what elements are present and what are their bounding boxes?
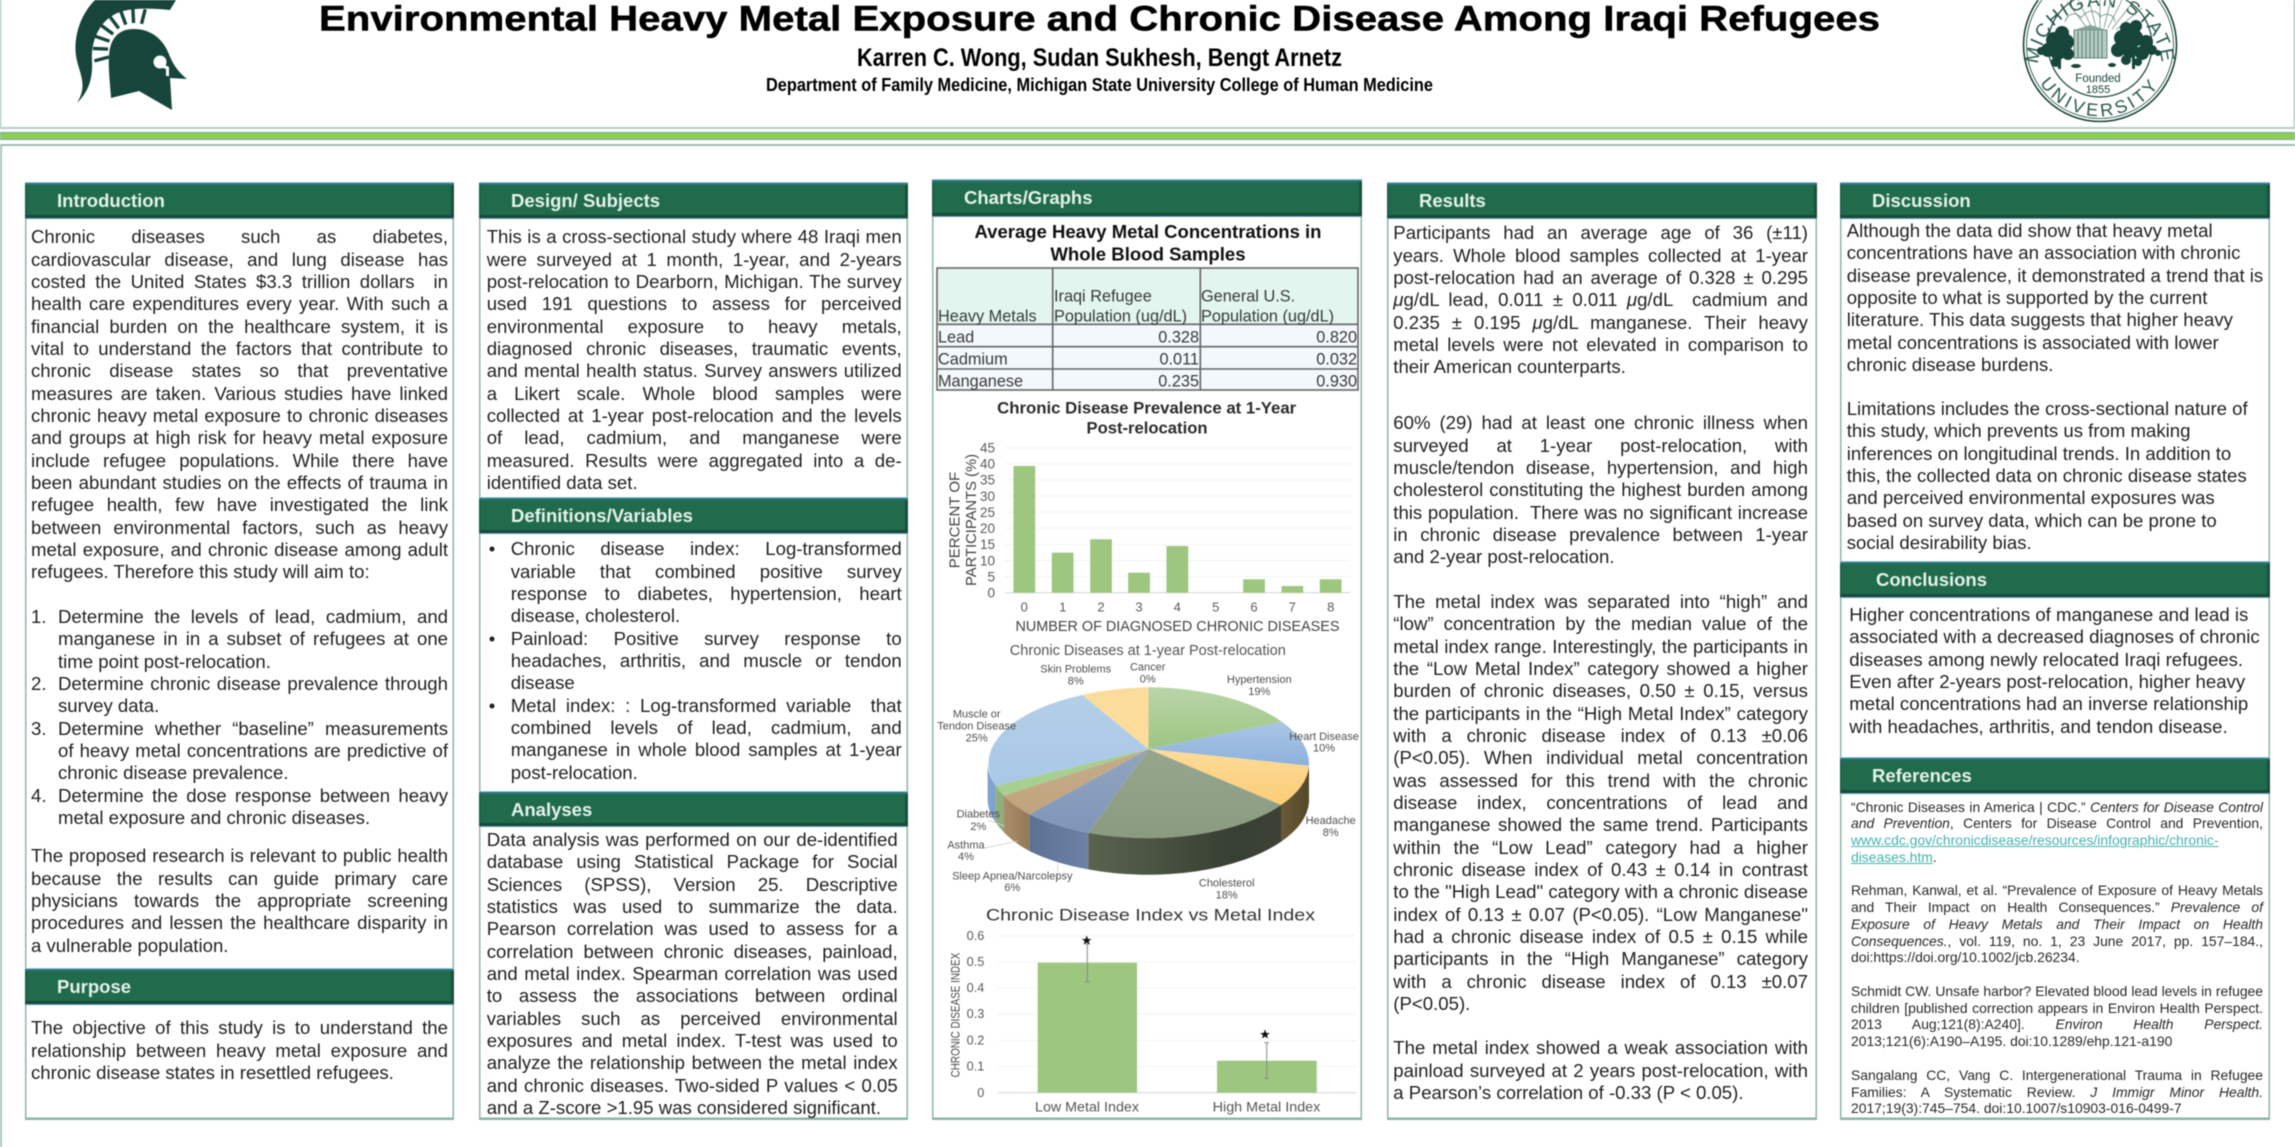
text: analyses: and a Z-score >1.95 was considered significant. — [487, 1097, 881, 1118]
text: discussion: disease prevalence, it demonstrated a trend that is — [1847, 265, 2263, 286]
text: discussion: chronic disease burdens. — [1847, 354, 2053, 375]
bar chart title: Chronic Disease Prevalence at 1-Year — [997, 399, 1297, 417]
table title — [974, 221, 1322, 265]
text: analyses: Pearson correlation was used to assess for a — [487, 918, 898, 939]
list: variable definitions: headaches, arthritis, and muscle or tendon — [511, 650, 902, 671]
pie chart: chronic diseases: 6% — [1004, 882, 1020, 894]
list: variable definitions: • — [489, 628, 495, 649]
pie chart: chronic diseases: Hypertension — [1227, 674, 1292, 686]
text: introduction paragraph: and groups at high risk for heavy metal exposure — [31, 427, 448, 448]
text: painload association — [1392, 1037, 1808, 1104]
list: variable definitions — [488, 538, 902, 784]
table: heavy metal concentrations: 0.235 — [1158, 373, 1199, 391]
text: chronic illness prevalence: surveyed at 1-year post-relocation, with — [1393, 435, 1808, 456]
text: references: 2017;19(3):745–754. doi:10.1007/s10903-016-0499-7 — [1851, 1100, 2182, 1116]
text: conclusions: metal concentrations had an inverse relationship — [1849, 693, 2248, 714]
text: metal index findings: to the "High Lead" category with a chronic disease — [1393, 881, 1808, 902]
bar chart: chronic disease prevalence: 40 — [980, 457, 995, 472]
text: design: measured. Results were aggregated into a de- — [487, 450, 902, 471]
heading: references — [1840, 758, 2270, 793]
heading: purpose: Purpose — [57, 976, 131, 997]
text: discussion: literature. This data suggests that higher heavy — [1847, 309, 2233, 330]
table: heavy metal concentrations: Population (ug/dL) — [1054, 308, 1187, 326]
panel: discussion, conclusions, references — [1840, 183, 2270, 1120]
list: study aims: Determine whether “baseline” measurements — [58, 718, 448, 739]
charts column — [936, 221, 1360, 1116]
bar chart: chronic disease prevalence: 4 — [1174, 600, 1181, 615]
text: metal index findings: with a chronic disease index of 0.13 ±0.07 — [1393, 971, 1808, 992]
bar chart: chronic disease prevalence: 3 — [1135, 600, 1143, 615]
pie chart: chronic diseases: 25% — [966, 733, 988, 745]
pie chart: chronic diseases: Tendon Disease — [937, 721, 1016, 733]
text: metal index findings: index of 0.13 ± 0.07 (P<0.05). “Low Manganese" — [1393, 904, 1808, 925]
text: public health relevance: a vulnerable population. — [31, 935, 228, 956]
pie chart: chronic diseases: Cholesterol — [1199, 878, 1255, 890]
pie chart: chronic diseases: 2% — [970, 821, 986, 833]
university seal: UNIVERSITY — [2041, 76, 2156, 118]
text: purpose — [30, 1017, 448, 1084]
text: public health relevance: procedures and lessen the healthcare disparity in — [31, 912, 448, 933]
panel: charts and graphs — [932, 180, 1362, 1120]
table: heavy metal concentrations: 0.011 — [1159, 350, 1199, 368]
text: introduction paragraph: refugees. Therefore this study will aim to: — [31, 561, 370, 582]
list: variable definitions: • — [489, 538, 495, 559]
table: heavy metal concentrations: Iraqi Refugee — [1054, 288, 1152, 306]
text: analyses: database using Statistical Package for Social — [487, 851, 898, 872]
bar chart: chronic disease prevalence: 25 — [980, 505, 995, 520]
text: design: were surveyed at 1 month, 1-year, and 2-years — [487, 249, 902, 270]
text: introduction paragraph: vital to understand the factors that contribute to — [31, 338, 448, 359]
text: limitations: social desirability bias. — [1847, 532, 2032, 553]
text: participants and metal levels: post-relocation had an average of 0.328 ± 0.295 — [1393, 267, 1808, 288]
text: participants and metal levels: metal levels were not elevated in comparison to — [1393, 334, 1808, 355]
bar chart title: Post-relocation — [1086, 419, 1208, 437]
bar chart: chronic disease index vs metal index: 0.5 — [967, 955, 984, 969]
table: heavy metal concentrations: 0.032 — [1316, 350, 1357, 368]
text: painload association: a Pearson’s correlation of -0.33 (P < 0.05). — [1393, 1082, 1744, 1103]
bar chart: chronic disease index vs metal index: 0 — [977, 1086, 984, 1100]
bar chart: chronic disease prevalence: 30 — [980, 489, 995, 504]
university seal: 1855 — [2086, 84, 2110, 96]
text: references: Consequences., vol. 119, no. 1, 23 June 2017, pp. 157–184., — [1851, 933, 2263, 949]
text: design: identified data set. — [487, 472, 638, 493]
text: discussion: Although the data did show that heavy metal — [1847, 220, 2213, 241]
text: chronic illness prevalence: and 2-year post-relocation. — [1393, 546, 1614, 567]
text: chronic illness prevalence: 60% (29) had at least one chronic illness when — [1393, 412, 1808, 433]
list: variable definitions: combined levels of lead, cadmium, and — [511, 717, 902, 738]
pie chart: chronic diseases: Cancer — [1130, 662, 1166, 674]
table: heavy metal concentrations — [937, 268, 1358, 391]
text: design: post-relocation to Dearborn, Michigan. The survey — [487, 271, 902, 292]
text: references: Schmidt CW. Unsafe harbor? Elevated blood lead levels in refugee — [1851, 983, 2263, 999]
heading: analyses: Analyses — [511, 799, 592, 820]
text: purpose: The objective of this study is to understand the — [31, 1017, 448, 1038]
text: chronic illness prevalence: in chronic disease prevalence between 1-year — [1393, 524, 1808, 545]
heading: discussion — [1840, 183, 2270, 218]
text: references: Families: A Systematic Review. J Immigr Minor Health. — [1851, 1084, 2263, 1100]
panel: results — [1387, 183, 1817, 1120]
text: analyses: and metal index. Spearman correlation was used — [487, 963, 898, 984]
text: discussion: opposite to what is supported by the current — [1847, 287, 2207, 308]
text: analyses — [486, 829, 898, 1119]
text: introduction paragraph: include refugee populations. While there have — [31, 450, 448, 471]
text: introduction paragraph: costed the United States $3.3 trillion dollars in — [31, 271, 448, 292]
text: participants and metal levels — [1392, 222, 1808, 378]
text: conclusions: diseases among newly relocated Iraqi refugees. — [1849, 649, 2243, 670]
text: metal index findings: manganese showed the same trend. Participants — [1393, 814, 1808, 835]
text: references: Sangalang CC, Vang C. Intergenerational Trauma in Refugee — [1851, 1067, 2263, 1083]
text: introduction paragraph: measures are taken. Various studies have linked — [31, 383, 448, 404]
text: references: 2013 Aug;121(8):A240]. Environ Health Perspect. — [1851, 1016, 2263, 1032]
text: conclusions: with headaches, arthritis, and tendon disease. — [1849, 716, 2228, 737]
text: metal index findings: burden of chronic diseases, 0.50 ± 0.15, versus — [1393, 680, 1808, 701]
index chart title: Chronic Disease Index vs Metal Index — [986, 906, 1316, 925]
pie chart: chronic diseases: 18% — [1216, 890, 1238, 902]
text: analyses: variables such as perceived environmental — [487, 1008, 898, 1029]
list: study aims: 4. — [31, 785, 47, 806]
list: study aims: manganese in in a subset of refugees at one — [58, 628, 448, 649]
pie chart: chronic diseases: Sleep Apnea/Narcolepsy — [952, 870, 1073, 882]
text: analyses: to assess the associations between ordinal — [487, 985, 898, 1006]
text: references: Rehman, Kanwal, et al. “Prevalence of Exposure of Heavy Metals — [1851, 882, 2263, 898]
table: heavy metal concentrations: 0.820 — [1316, 329, 1357, 347]
heading: definitions / variables — [479, 498, 908, 533]
list: study aims: time point post-relocation. — [58, 651, 271, 672]
table: heavy metal concentrations: Cadmium — [938, 350, 1008, 368]
text: introduction paragraph: cardiovascular disease, and lung disease has — [31, 249, 448, 270]
text: chronic illness prevalence: this population. There was no significant increase — [1393, 502, 1808, 523]
text: metal index findings: chronic disease index of 0.43 ± 0.14 in contrast — [1393, 859, 1808, 880]
page frame — [0, 145, 2, 1147]
text: participants and metal levels: 0.235 ± 0.195 μg/dL manganese. Their heavy — [1393, 312, 1808, 333]
table: heavy metal concentrations: 0.930 — [1316, 373, 1357, 391]
list: study aims: chronic disease prevalence. — [58, 762, 288, 783]
bar chart: chronic disease index vs metal index: 0.6 — [967, 929, 984, 943]
list: variable definitions: Metal index: : Log-transformed variable that — [511, 695, 902, 716]
bar chart: chronic disease prevalence: 0 — [987, 586, 995, 600]
text: references: children [published correction appears in Environ Health Perspect. — [1851, 1000, 2263, 1016]
text: metal index findings: metal index range. Interestingly, the participants in — [1393, 636, 1808, 657]
text: metal index findings: disease index, concentrations of lead and — [1393, 792, 1808, 813]
list: variable definitions: Painload: Positive survey response to — [511, 628, 902, 649]
bar chart: chronic disease prevalence: 5 — [987, 569, 995, 584]
text: design: used 191 questions to assess for perceived — [487, 293, 902, 314]
text: analyses: analyze the relationship between the metal index — [487, 1052, 898, 1073]
university seal: Founded — [2075, 73, 2121, 85]
text: metal index findings: (P<0.05). — [1393, 993, 1470, 1014]
pie chart: chronic diseases: Skin Problems — [1040, 663, 1112, 675]
text: references: and Their Impact on Health Consequences.” Prevalence of — [1851, 899, 2263, 915]
pie chart: chronic diseases: Headache — [1306, 815, 1356, 827]
list: study aims: 2. — [31, 673, 47, 694]
heading: conclusions — [1840, 562, 2270, 597]
bar chart: chronic disease prevalence: 35 — [980, 473, 995, 488]
bar chart: chronic disease prevalence: 10 — [980, 553, 995, 568]
text: introduction paragraph: health care expenditures every year. With such a — [31, 293, 448, 314]
pie chart: chronic diseases: Muscle or — [953, 708, 1001, 720]
text: metal index findings: was assessed for this trend with the chronic — [1393, 770, 1808, 791]
text: introduction paragraph — [30, 226, 449, 583]
text: painload association: painload surveyed at 2 years post-relocation, with — [1393, 1060, 1808, 1081]
text: introduction paragraph: been abundant studies on the effects of trauma in — [31, 472, 448, 493]
text: design: This is a cross-sectional study where 48 Iraqi men — [487, 226, 902, 247]
text: discussion: metal concentrations is associated with lower — [1847, 332, 2219, 353]
text: discussion: concentrations have an association with chronic — [1847, 242, 2240, 263]
heading: discussion: Discussion — [1872, 190, 1971, 211]
bar chart title — [997, 399, 1297, 437]
list: study aims — [30, 606, 449, 829]
heading: results: Results — [1419, 190, 1486, 211]
text: introduction paragraph: metal exposure, and chronic disease among adult — [31, 539, 448, 560]
poster title: Environmental Heavy Metal Exposure and Chronic Disease Among Iraqi Refugees — [319, 0, 1880, 38]
text: public health relevance: because the results can guide primary care — [31, 868, 448, 889]
table: heavy metal concentrations: 0.328 — [1158, 329, 1199, 347]
text: analyses: correlation between chronic diseases, painload, — [487, 941, 898, 962]
text: introduction paragraph: Chronic diseases such as diabetes, — [31, 226, 448, 247]
heading: conclusions: Conclusions — [1876, 569, 1987, 590]
university seal — [2022, 0, 2178, 124]
logo: spartan helmet — [75, 0, 187, 110]
bar chart: chronic disease index vs metal index: CHRONIC DISEASE INDEX — [950, 952, 962, 1077]
text: analyses: Data analysis was performed on our de-identified — [487, 829, 898, 850]
panel: design, definitions, analyses — [479, 183, 908, 1120]
department: Department of Family Medicine, Michigan State University College of Human Medicine — [766, 75, 1433, 95]
pie chart: chronic diseases: 10% — [1313, 743, 1335, 755]
text: analyses: Sciences (SPSS), Version 25. Descriptive — [487, 874, 898, 895]
text: limitations — [1846, 398, 2248, 554]
text: references: Exposure of Heavy Metals and Their Impact on Health — [1851, 916, 2263, 932]
text: metal index findings: the participants in the “High Metal Index” category — [1393, 703, 1808, 724]
text: public health relevance: physicians towards the appropriate screening — [31, 890, 448, 911]
heading: results — [1387, 183, 1817, 218]
text: public health relevance: The proposed research is relevant to public health — [31, 845, 448, 866]
text: design — [486, 226, 902, 493]
bar chart: chronic disease prevalence: 7 — [1289, 600, 1296, 615]
header banner — [0, 0, 2295, 146]
text: conclusions: Higher concentrations of manganese and lead is — [1849, 604, 2248, 625]
text: participants and metal levels: their American counterparts. — [1393, 356, 1626, 377]
bar chart: chronic disease prevalence: 5 — [1212, 600, 1219, 615]
bar chart: chronic disease prevalence: 0 — [1021, 600, 1028, 615]
text: design: and mental health status. Survey answers utilized — [487, 360, 902, 381]
list: variable definitions: variable that combined positive survey — [511, 561, 902, 582]
pie chart title: Chronic Diseases at 1-year Post-relocation — [1010, 643, 1286, 659]
text: metal index findings: with a chronic disease index of 0.13 ±0.06 — [1393, 725, 1808, 746]
text: metal index findings: had a chronic disease index of 0.5 ± 0.15 while — [1393, 926, 1808, 947]
heading: definitions / variables: Definitions/Variables — [511, 505, 693, 526]
text: participants and metal levels: years. Whole blood samples collected at 1-year — [1393, 245, 1808, 266]
heading: purpose — [25, 969, 454, 1004]
text: references: diseases.htm. — [1851, 849, 1937, 865]
text: design: environmental exposure to heavy metals, — [487, 316, 902, 337]
table: heavy metal concentrations: Manganese — [938, 373, 1023, 391]
text: introduction paragraph: financial burden on the healthcare system, it is — [31, 316, 448, 337]
bar chart: chronic disease prevalence: PERCENT OF — [946, 472, 963, 568]
table title: Average Heavy Metal Concentrations in — [974, 221, 1322, 242]
bar chart: chronic disease prevalence: 45 — [980, 440, 995, 456]
text: introduction paragraph: refugee health, few have investigated the link — [31, 494, 448, 515]
table: heavy metal concentrations: Population (ug/dL) — [1201, 308, 1334, 326]
bar chart: chronic disease index vs metal index — [950, 929, 1356, 1115]
text: painload association: The metal index showed a weak association with — [1393, 1037, 1808, 1058]
bar chart: chronic disease prevalence — [946, 440, 1350, 635]
pie chart: chronic diseases: Asthma — [947, 839, 986, 851]
text: metal index findings: within the “Low Lead” category had a higher — [1393, 837, 1808, 858]
text: references: www.cdc.gov/chronicdisease/resources/infographic/chronic- — [1851, 832, 2218, 848]
bar chart: chronic disease index vs metal index: 0.4 — [967, 981, 984, 995]
text: analyses: exposures and metal index. T-test was used to — [487, 1030, 898, 1051]
pie chart: chronic diseases: Diabetes — [957, 809, 1001, 821]
text: conclusions: associated with a decreased diagnoses of chronic — [1849, 626, 2260, 647]
text: analyses: statistics was used to summarize the data. — [487, 896, 898, 917]
bar chart: chronic disease index vs metal index: 0.3 — [967, 1007, 984, 1021]
text: metal index findings: “low” concentration by the median value of the — [1393, 613, 1808, 634]
text: design: collected at 1-year post-relocation and the levels — [487, 405, 902, 426]
text: chronic illness prevalence: muscle/tendon disease, hypertension, and high — [1393, 457, 1808, 478]
text: references — [1850, 798, 2265, 1117]
text: public health relevance — [30, 845, 448, 957]
heading: charts / graphs — [932, 180, 1362, 216]
heading: analyses — [479, 792, 908, 826]
text: limitations: this, the collected data on chronic disease states — [1847, 465, 2247, 486]
table: heavy metal concentrations: Lead — [938, 329, 974, 347]
heading: introduction — [25, 183, 454, 218]
list: study aims: Determine the levels of lead, cadmium, and — [58, 606, 448, 627]
list: variable definitions: Chronic disease index: Log-transformed — [511, 538, 902, 559]
text: references: “Chronic Diseases in America | CDC.” Centers for Disease Control — [1851, 798, 2263, 814]
text: discussion — [1846, 220, 2264, 375]
text: conclusions: Even after 2-years post-relocation, higher heavy — [1849, 671, 2245, 692]
pie chart: chronic diseases: 0% — [1140, 674, 1156, 686]
text: participants and metal levels: Participants had an average age of 36 (±11) — [1393, 222, 1808, 243]
text: metal index findings: the “Low Metal Index” category showed a higher — [1393, 658, 1808, 679]
list: variable definitions: response to diabetes, hypertension, heart — [511, 583, 902, 604]
list: study aims: survey data. — [58, 695, 159, 716]
panel: introduction and purpose — [25, 183, 454, 1120]
text: introduction paragraph: chronic heavy metal exposure to chronic diseases — [31, 405, 448, 426]
text: metal index findings — [1392, 591, 1808, 1015]
bar chart: chronic disease prevalence: 8 — [1327, 600, 1334, 615]
list: study aims: 3. — [31, 718, 47, 739]
text: design: of lead, cadmium, and manganese were — [487, 427, 902, 448]
pie chart: chronic diseases — [937, 662, 1359, 902]
list: study aims: Determine chronic disease prevalence through — [58, 673, 448, 694]
bar chart: chronic disease index vs metal index: 0.1 — [967, 1060, 984, 1074]
list: study aims: metal exposure and chronic diseases. — [58, 807, 370, 828]
heading: introduction: Introduction — [57, 190, 165, 211]
text: limitations: this study, which prevents us from making — [1847, 420, 2190, 441]
pie chart: chronic diseases: Heart Disease — [1289, 731, 1359, 743]
heading: charts / graphs: Charts/Graphs — [964, 187, 1093, 208]
bar chart: chronic disease prevalence: 20 — [980, 521, 995, 536]
text: metal index findings: participants in the “High Manganese” category — [1393, 948, 1808, 969]
text: conclusions — [1848, 604, 2260, 737]
authors: Karren C. Wong, Sudan Sukhesh, Bengt Arnetz — [857, 44, 1342, 72]
text: purpose: chronic disease states in resettled refugees. — [31, 1062, 394, 1083]
text: analyses: and chronic diseases. Two-sided P values < 0.05 — [487, 1075, 898, 1096]
text: references: doi:https://doi.org/10.1002/jcb.26234. — [1851, 949, 2080, 965]
bar chart: chronic disease prevalence: 2 — [1097, 600, 1105, 615]
bar chart: chronic disease prevalence: NUMBER OF DIAGNOSED CHRONIC DISEASES — [1016, 618, 1340, 635]
text: references: 2013;121(6):A190–A195. doi:10.1289/ehp.121-a190 — [1851, 1033, 2172, 1049]
list: variable definitions: disease, cholesterol. — [511, 605, 680, 626]
pie chart: chronic diseases: 19% — [1248, 686, 1271, 698]
heading: references: References — [1872, 765, 1972, 786]
bar chart: chronic disease prevalence: 1 — [1059, 600, 1066, 615]
heading: design / subjects — [479, 183, 908, 218]
pie chart: chronic diseases: 4% — [958, 851, 974, 863]
list: study aims: of heavy metal concentrations are predictive of — [58, 740, 448, 761]
text: introduction paragraph: between environmental factors, such as heavy — [31, 517, 448, 538]
heading: design / subjects: Design/ Subjects — [511, 190, 660, 211]
text: limitations: inferences on longitudinal trends. In addition to — [1847, 443, 2231, 464]
list: variable definitions: disease — [511, 672, 575, 693]
pie chart: chronic diseases: 8% — [1323, 827, 1339, 839]
text: purpose: relationship between heavy metal exposure and — [31, 1040, 448, 1061]
text: chronic illness prevalence: cholesterol constituting the highest burden among — [1393, 479, 1808, 500]
bar chart: chronic disease index vs metal index: High Metal Index — [1213, 1100, 1321, 1115]
list: variable definitions: manganese in whole blood samples at 1-year — [511, 739, 902, 760]
bar chart: chronic disease prevalence: 15 — [980, 537, 995, 552]
table title: Whole Blood Samples — [1050, 244, 1246, 265]
table: heavy metal concentrations: Heavy Metals — [938, 308, 1037, 326]
text: limitations: and perceived environmental exposures was — [1847, 487, 2215, 508]
text: introduction paragraph: chronic disease states so that preventative — [31, 360, 448, 381]
text: limitations: based on survey data, which can be prone to — [1847, 510, 2217, 531]
text: metal index findings: (P<0.05). When individual metal concentration — [1393, 747, 1808, 768]
bar chart: chronic disease prevalence: PARTICIPANTS (%) — [963, 454, 980, 586]
text: metal index findings: The metal index was separated into “high” and — [1393, 591, 1808, 612]
pie chart: chronic diseases: 8% — [1068, 675, 1084, 687]
list: variable definitions: post-relocation. — [511, 762, 638, 783]
bar chart: chronic disease index vs metal index: 0.2 — [967, 1033, 984, 1047]
list: variable definitions: • — [489, 695, 495, 716]
table: heavy metal concentrations: General U.S. — [1201, 288, 1295, 306]
bar chart: chronic disease index vs metal index: Low Metal Index — [1035, 1100, 1139, 1115]
list: study aims: Determine the dose response between heavy — [58, 785, 448, 806]
bar chart: chronic disease prevalence: 6 — [1250, 600, 1258, 615]
text: references: and Prevention, Centers for Disease Control and Prevention, — [1851, 815, 2263, 831]
text: chronic illness prevalence — [1392, 412, 1808, 568]
list: study aims: 1. — [31, 606, 47, 627]
text: design: diagnosed chronic diseases, traumatic events, — [487, 338, 902, 359]
text: participants and metal levels: μg/dL lead, 0.011 ± 0.011 μg/dL cadmium and — [1393, 289, 1808, 310]
text: limitations: Limitations includes the cross-sectional nature of — [1847, 398, 2248, 419]
text: design: a Likert scale. Whole blood samples were — [487, 383, 902, 404]
